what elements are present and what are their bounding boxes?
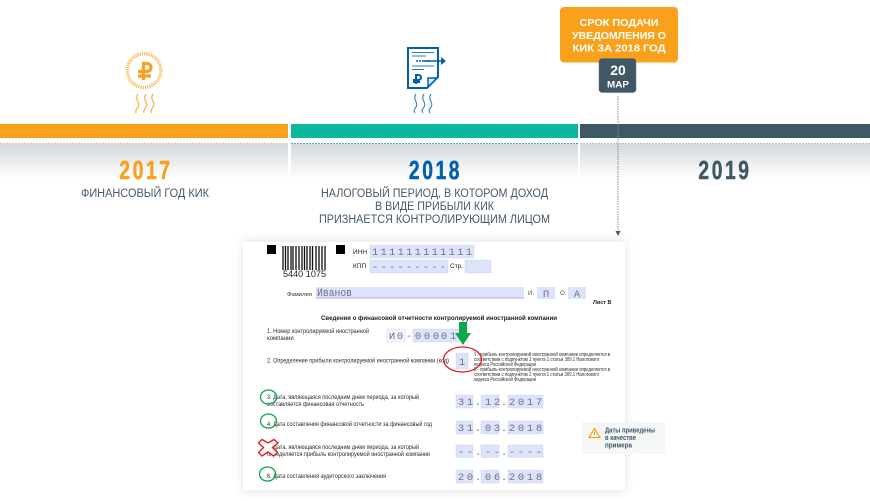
row 2: profit determination: кодекса Российской Федерации bbox=[474, 376, 536, 383]
form sheet shadow bbox=[243, 241, 625, 491]
icon: document with ruble bbox=[408, 48, 446, 88]
barcode bbox=[267, 245, 345, 279]
row 3 bbox=[267, 394, 543, 409]
highlight: red ellipse bbox=[444, 347, 482, 372]
callout: notification deadline: КИК ЗА 2018 ГОД bbox=[572, 42, 666, 54]
row 3: составляется финансовая отчетность bbox=[267, 402, 364, 408]
year 2018 bbox=[319, 155, 550, 226]
field: КПП: КПП bbox=[353, 263, 366, 270]
row 2: profit determination bbox=[267, 351, 610, 383]
row 1: company number: компании bbox=[267, 336, 294, 342]
arrow: green down bbox=[455, 322, 471, 345]
field: КПП: --------- bbox=[372, 262, 446, 274]
row 4 bbox=[267, 421, 543, 435]
icon: blue heat waves bbox=[414, 94, 432, 113]
field: Фамилия: И. bbox=[528, 291, 534, 297]
red cross marker bbox=[258, 440, 278, 456]
date badge: 20 March: 20 bbox=[610, 62, 626, 78]
date badge: 20 March: МАР bbox=[607, 80, 630, 90]
timeline bands bbox=[0, 124, 870, 179]
note: example dates bbox=[582, 422, 665, 454]
field: Фамилия: Фамилия bbox=[287, 292, 312, 298]
row 2: profit determination: соответствии с подпунктом 1 пункта 1 статьи 309.1 Налогового bbox=[474, 357, 599, 363]
green markers bbox=[260, 390, 276, 481]
row 3: 3. Дата, являющаяся последним днем периода, за который bbox=[267, 394, 419, 401]
row 1: company number: И0-00001 bbox=[389, 331, 456, 343]
field: ИНН: 111111111111 bbox=[372, 247, 472, 259]
form heading: Сведения о финансовой отчетности контролируемой иностранной компании bbox=[321, 314, 557, 322]
row 6: 6. Дата составления аудиторского заключения bbox=[267, 474, 386, 480]
barcode: 5440 1075 bbox=[283, 269, 326, 279]
date badge: 20 March bbox=[599, 58, 636, 92]
row 5: определяется прибыль контролируемой иностранной компании bbox=[267, 451, 430, 458]
note: example dates: Даты приведены bbox=[605, 428, 655, 434]
year 2019: 2019 bbox=[698, 155, 752, 185]
row 1: company number bbox=[267, 328, 459, 343]
row 5: 5. Дата, являющаяся последним днем периода, за который bbox=[267, 444, 419, 451]
year 2017 bbox=[81, 155, 209, 200]
row 6 bbox=[267, 470, 543, 484]
field: Фамилия: Лист В bbox=[593, 300, 612, 306]
row 4: 4. Дата составления финансовой отчетности за финансовый год bbox=[267, 421, 432, 428]
row 6: 20.06.2018 bbox=[458, 472, 542, 484]
row 2: profit determination: 1 bbox=[459, 357, 465, 369]
row 5 bbox=[267, 444, 543, 459]
row 2: profit determination: соответствии с подпунктом 2 пункта 1 статьи 309.1 Налогового bbox=[474, 372, 599, 378]
row 5: --.--.---- bbox=[458, 447, 542, 459]
year 2017: 2017 bbox=[119, 155, 173, 185]
row 2: profit determination: 1 - прибыль контролируемой иностранной компании определяется в bbox=[474, 351, 610, 358]
form sheet: Лист В bbox=[243, 242, 625, 490]
caption 2018: ПРИЗНАЕТСЯ КОНТРОЛИРУЮЩИМ ЛИЦОМ bbox=[319, 214, 550, 226]
note: example dates: примера bbox=[605, 442, 632, 450]
field: Фамилия: О. bbox=[560, 291, 567, 297]
field: Фамилия: Иванов bbox=[317, 288, 352, 300]
field: Фамилия bbox=[287, 287, 612, 306]
field: Фамилия: А bbox=[574, 289, 581, 301]
row 2: profit determination: 2. Определение прибыли контролируемой иностранной компании (код) bbox=[267, 358, 449, 364]
callout: notification deadline: УВЕДОМЛЕНИЯ О bbox=[572, 30, 666, 42]
row 3: 31.12.2017 bbox=[458, 397, 542, 409]
row 2: profit determination: кодекса Российской Федерации bbox=[474, 361, 536, 368]
caption 2017: ФИНАНСОВЫЙ ГОД КИК bbox=[81, 187, 209, 200]
callout: notification deadline: СРОК ПОДАЧИ bbox=[580, 17, 658, 29]
icon: orange heat waves bbox=[136, 94, 154, 113]
caption 2018: В ВИДЕ ПРИБЫЛИ КИК bbox=[375, 201, 494, 213]
field: ИНН: ИНН bbox=[353, 249, 367, 256]
field: КПП bbox=[353, 260, 491, 274]
year 2018: 2018 bbox=[409, 155, 462, 185]
caption 2018: НАЛОГОВЫЙ ПЕРИОД, В КОТОРОМ ДОХОД bbox=[321, 187, 548, 200]
arrow: deadline pointer bbox=[616, 96, 620, 236]
row 4: 31.03.2018 bbox=[458, 423, 542, 435]
note: example dates: в качестве bbox=[605, 435, 636, 442]
row 2: profit determination: 2 - прибыль контролируемой иностранной компании определяется в bbox=[474, 366, 610, 373]
caption 2018 bbox=[319, 187, 550, 226]
row 1: company number: 1. Номер контролируемой иностранной bbox=[267, 328, 369, 335]
callout: notification deadline bbox=[560, 7, 678, 62]
icon: ruble coin bbox=[127, 54, 161, 87]
field: КПП: Стр. bbox=[450, 263, 463, 270]
field: Фамилия: П bbox=[543, 289, 549, 301]
